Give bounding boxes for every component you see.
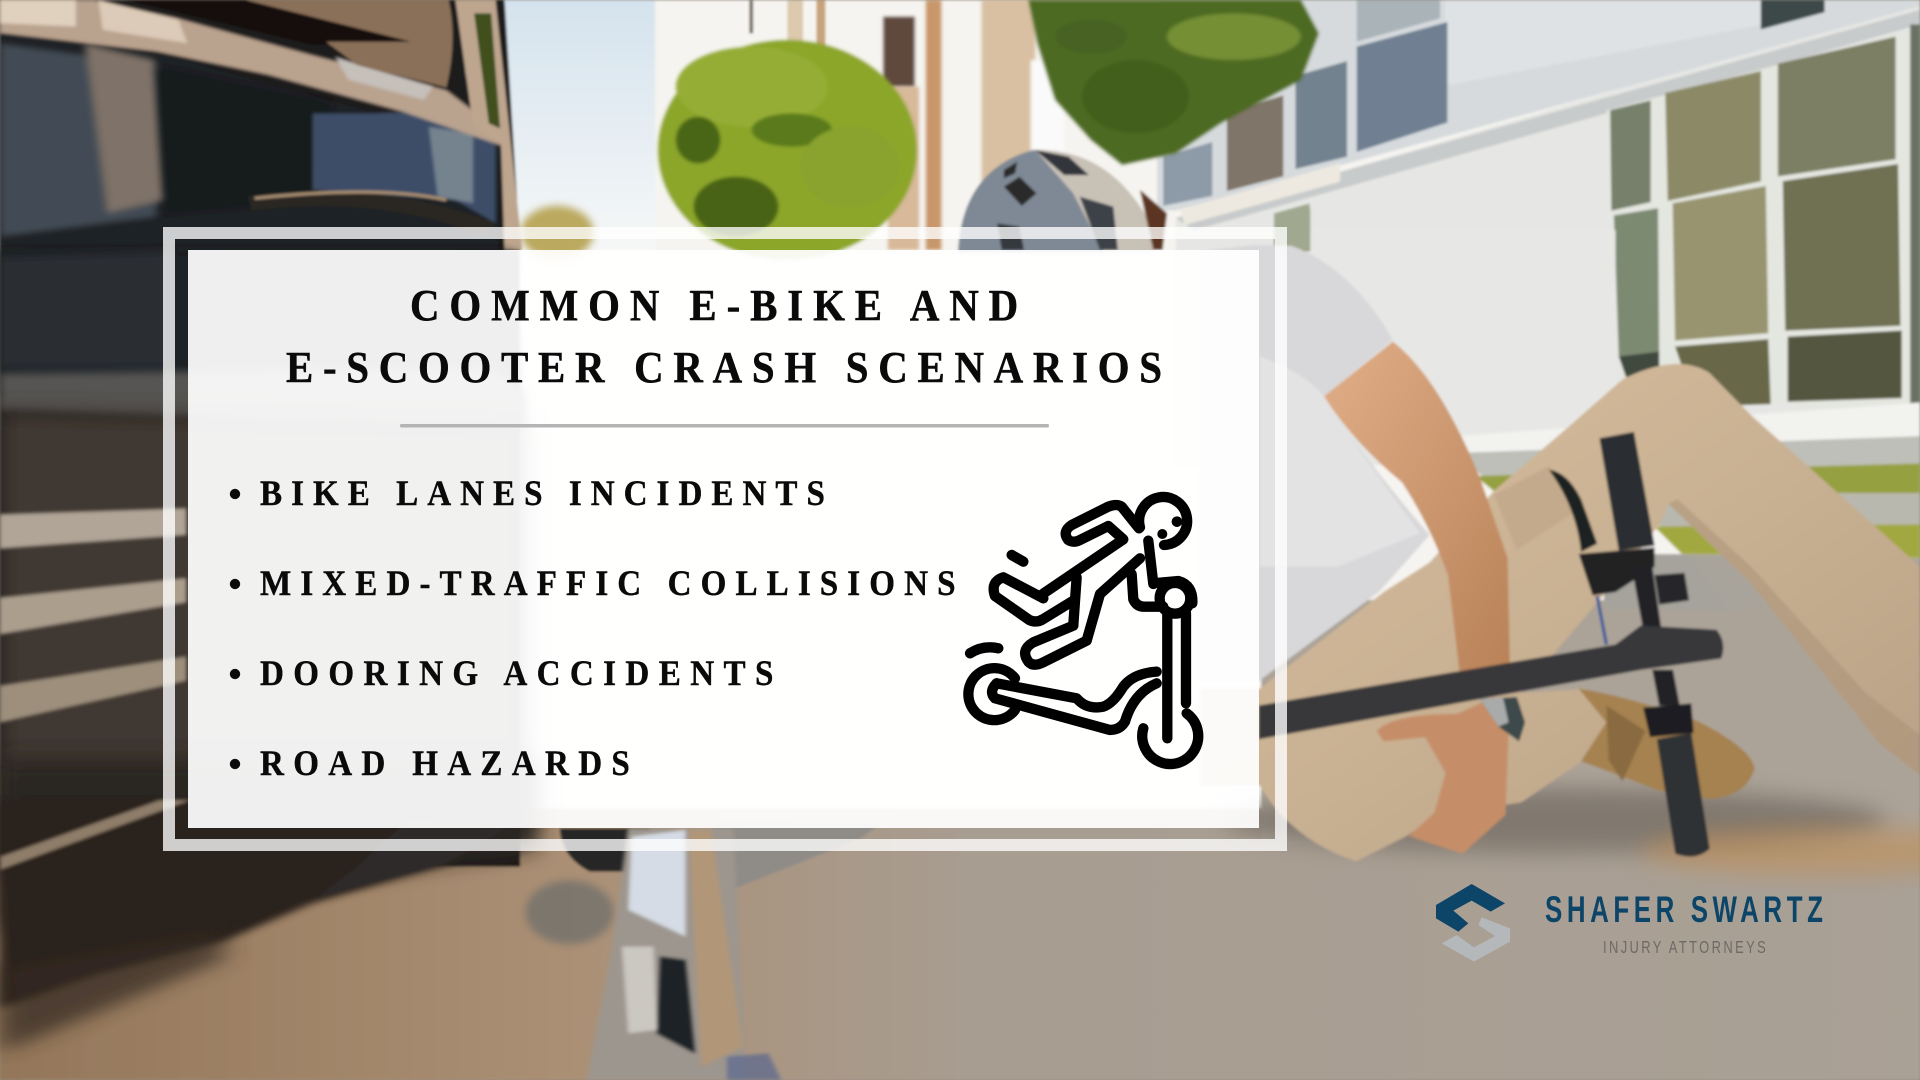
rider shirt (1200, 245, 1430, 680)
logo: Shafer Swartz (1436, 884, 1823, 962)
divider (400, 424, 1049, 428)
rider shoe (1579, 689, 1755, 799)
title: COMMON E-BIKE AND (410, 282, 1018, 330)
rider helmet (958, 150, 1167, 253)
icon: rider falling off scooter (968, 497, 1198, 764)
trees (658, 0, 1319, 260)
title (286, 282, 1162, 392)
scene behind rider: wall base, grass, kerb (1310, 230, 1920, 611)
logo mark (1436, 884, 1510, 962)
item: road hazards: ROAD HAZARDS (260, 744, 630, 783)
logo name: SHAFER SWARTZ (1545, 888, 1823, 930)
car front (0, 0, 539, 931)
road surface (0, 600, 1920, 1080)
blurred scooter in foreground (560, 823, 880, 1080)
building on right (1157, 0, 1920, 465)
rider arm (1324, 341, 1510, 672)
logo tagline: INJURY ATTORNEYS (1603, 938, 1766, 958)
rider hand and watch (1377, 697, 1525, 854)
car underside and tyre (0, 800, 517, 1053)
item: bike lanes incidents: BIKE LANES INCIDENTS (260, 474, 825, 513)
rider figure (1200, 245, 1920, 861)
item: dooring accidents: DOORING ACCIDENTS (260, 654, 773, 693)
outer frame (169, 233, 1281, 845)
ledge by tree (1180, 163, 1340, 250)
fallen scooter (1259, 432, 1723, 857)
item: mixed-traffic collisions: MIXED-TRAFFIC COLLISIONS (260, 564, 956, 603)
bullet list (230, 474, 956, 783)
white panel (188, 250, 1259, 828)
title: E-SCOOTER CRASH SCENARIOS (286, 344, 1162, 392)
building windows (1607, 24, 1920, 422)
rider trousers (1200, 364, 1920, 861)
